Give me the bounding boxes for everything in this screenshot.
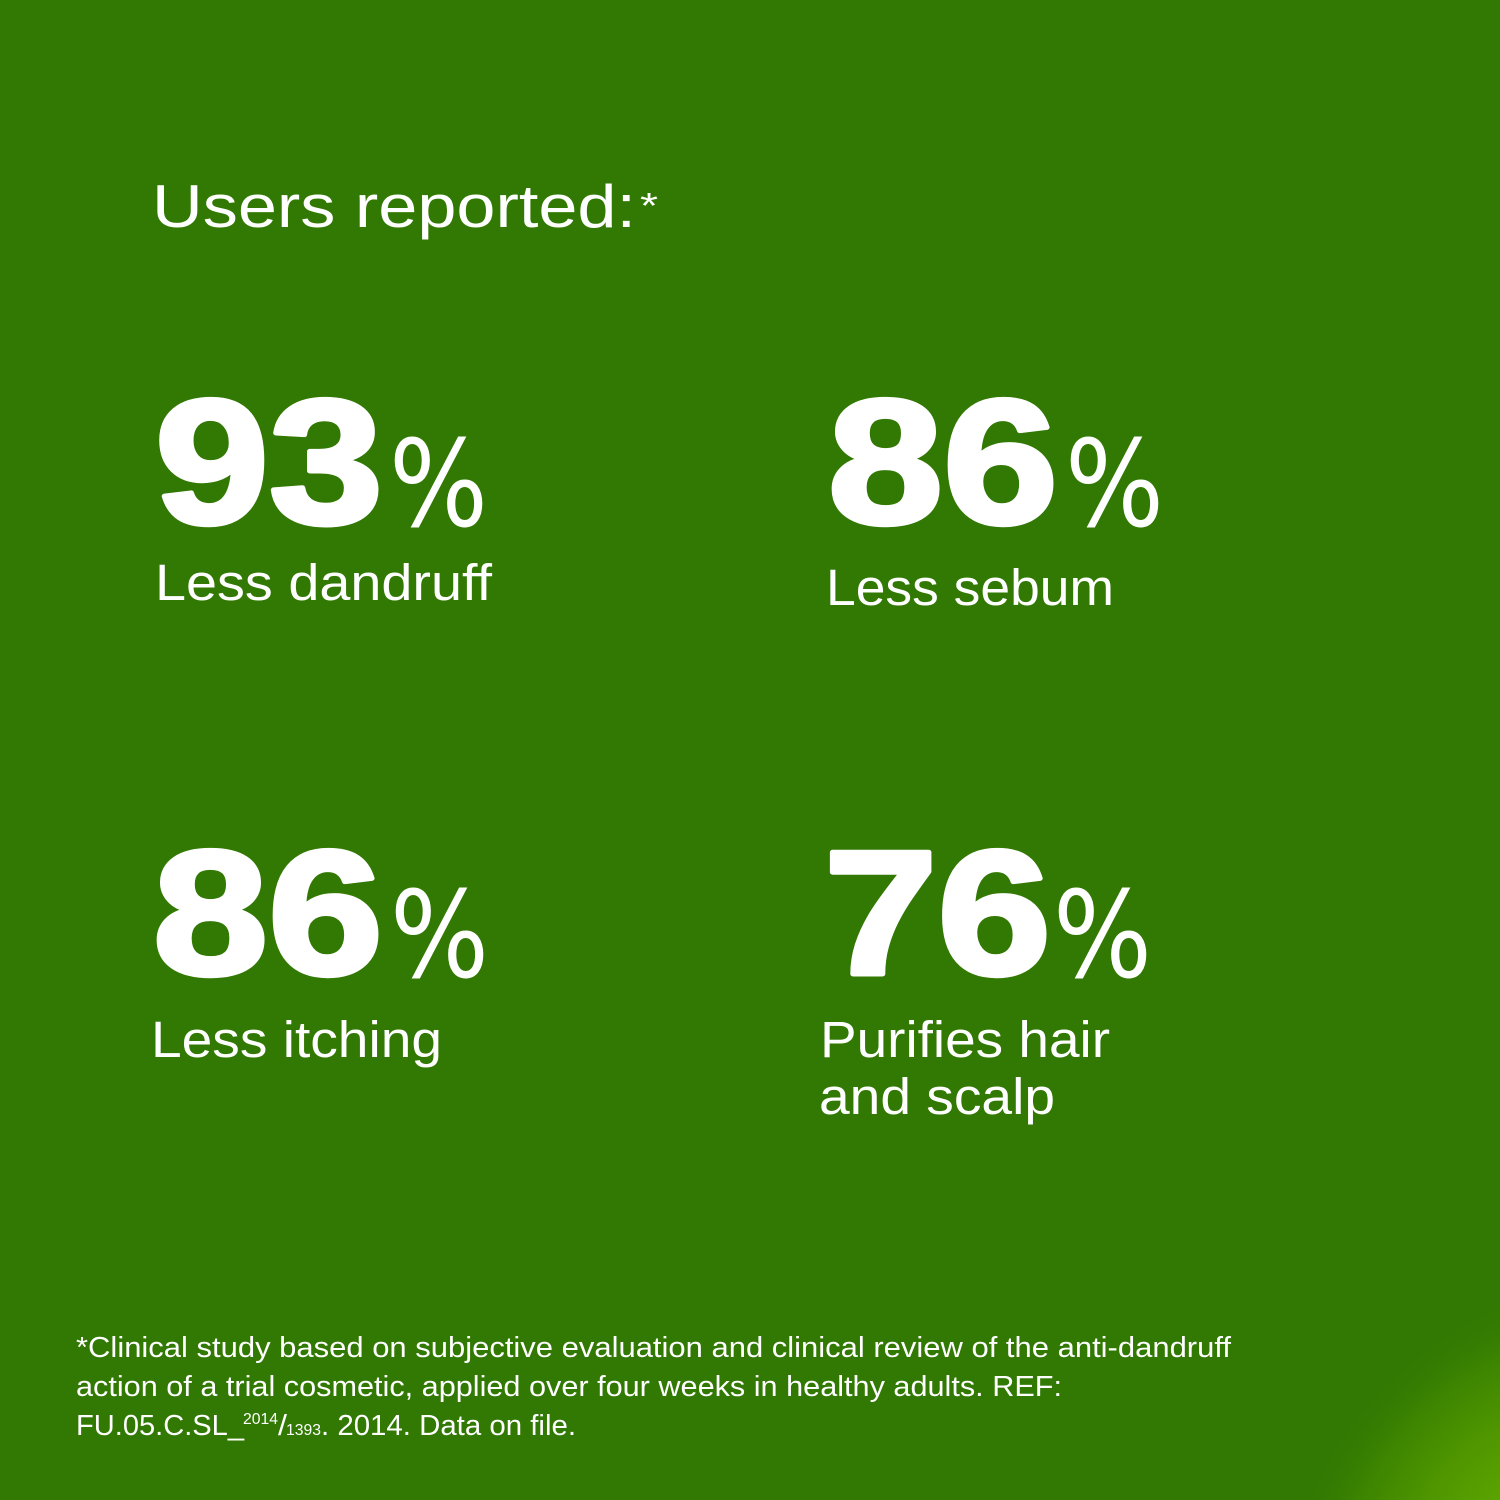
stat: 86% less sebum (826, 363, 1164, 616)
stat: 76% purifies hair and scalp (819, 814, 1152, 1125)
footnote: / (278, 1410, 288, 1442)
stat: 93% less dandruff: % (389, 416, 488, 555)
stat: 86% less itching: % (390, 867, 489, 1006)
heading: * (640, 185, 658, 226)
stat: 93% less dandruff: 93 (155, 363, 383, 561)
stat: 86% less sebum: 86 (828, 363, 1058, 561)
footnote: 1393 (286, 1422, 321, 1439)
stat: 86% less itching (151, 814, 489, 1068)
footnote (76, 1332, 1232, 1442)
stat: 93% less dandruff (155, 363, 493, 611)
stat: 76% purifies hair and scalp: % (1053, 867, 1152, 1006)
footnote: . 2014. Data on file. (321, 1410, 576, 1442)
stat: 76% purifies hair and scalp: 76 (824, 814, 1051, 1012)
heading: Users reported: (152, 173, 636, 240)
stat: 86% less itching: 86 (153, 814, 383, 1012)
stat: 86% less itching: Less itching (151, 1011, 442, 1068)
footnote: action of a trial cosmetic, applied over four weeks in healthy adults. REF: (76, 1371, 1062, 1403)
stat: 93% less dandruff: Less dandruff (155, 554, 493, 611)
stat: 76% purifies hair and scalp: and scalp (819, 1068, 1055, 1125)
stat: 86% less sebum: Less sebum (826, 559, 1114, 616)
stat: 76% purifies hair and scalp: Purifies hair (820, 1011, 1110, 1068)
footnote: *Clinical study based on subjective evaluation and clinical review of the anti-dandruff (76, 1332, 1232, 1364)
footnote: 2014 (243, 1411, 278, 1428)
stat: 86% less sebum: % (1065, 416, 1164, 555)
footnote: FU.05.C.SL_ (76, 1410, 245, 1442)
